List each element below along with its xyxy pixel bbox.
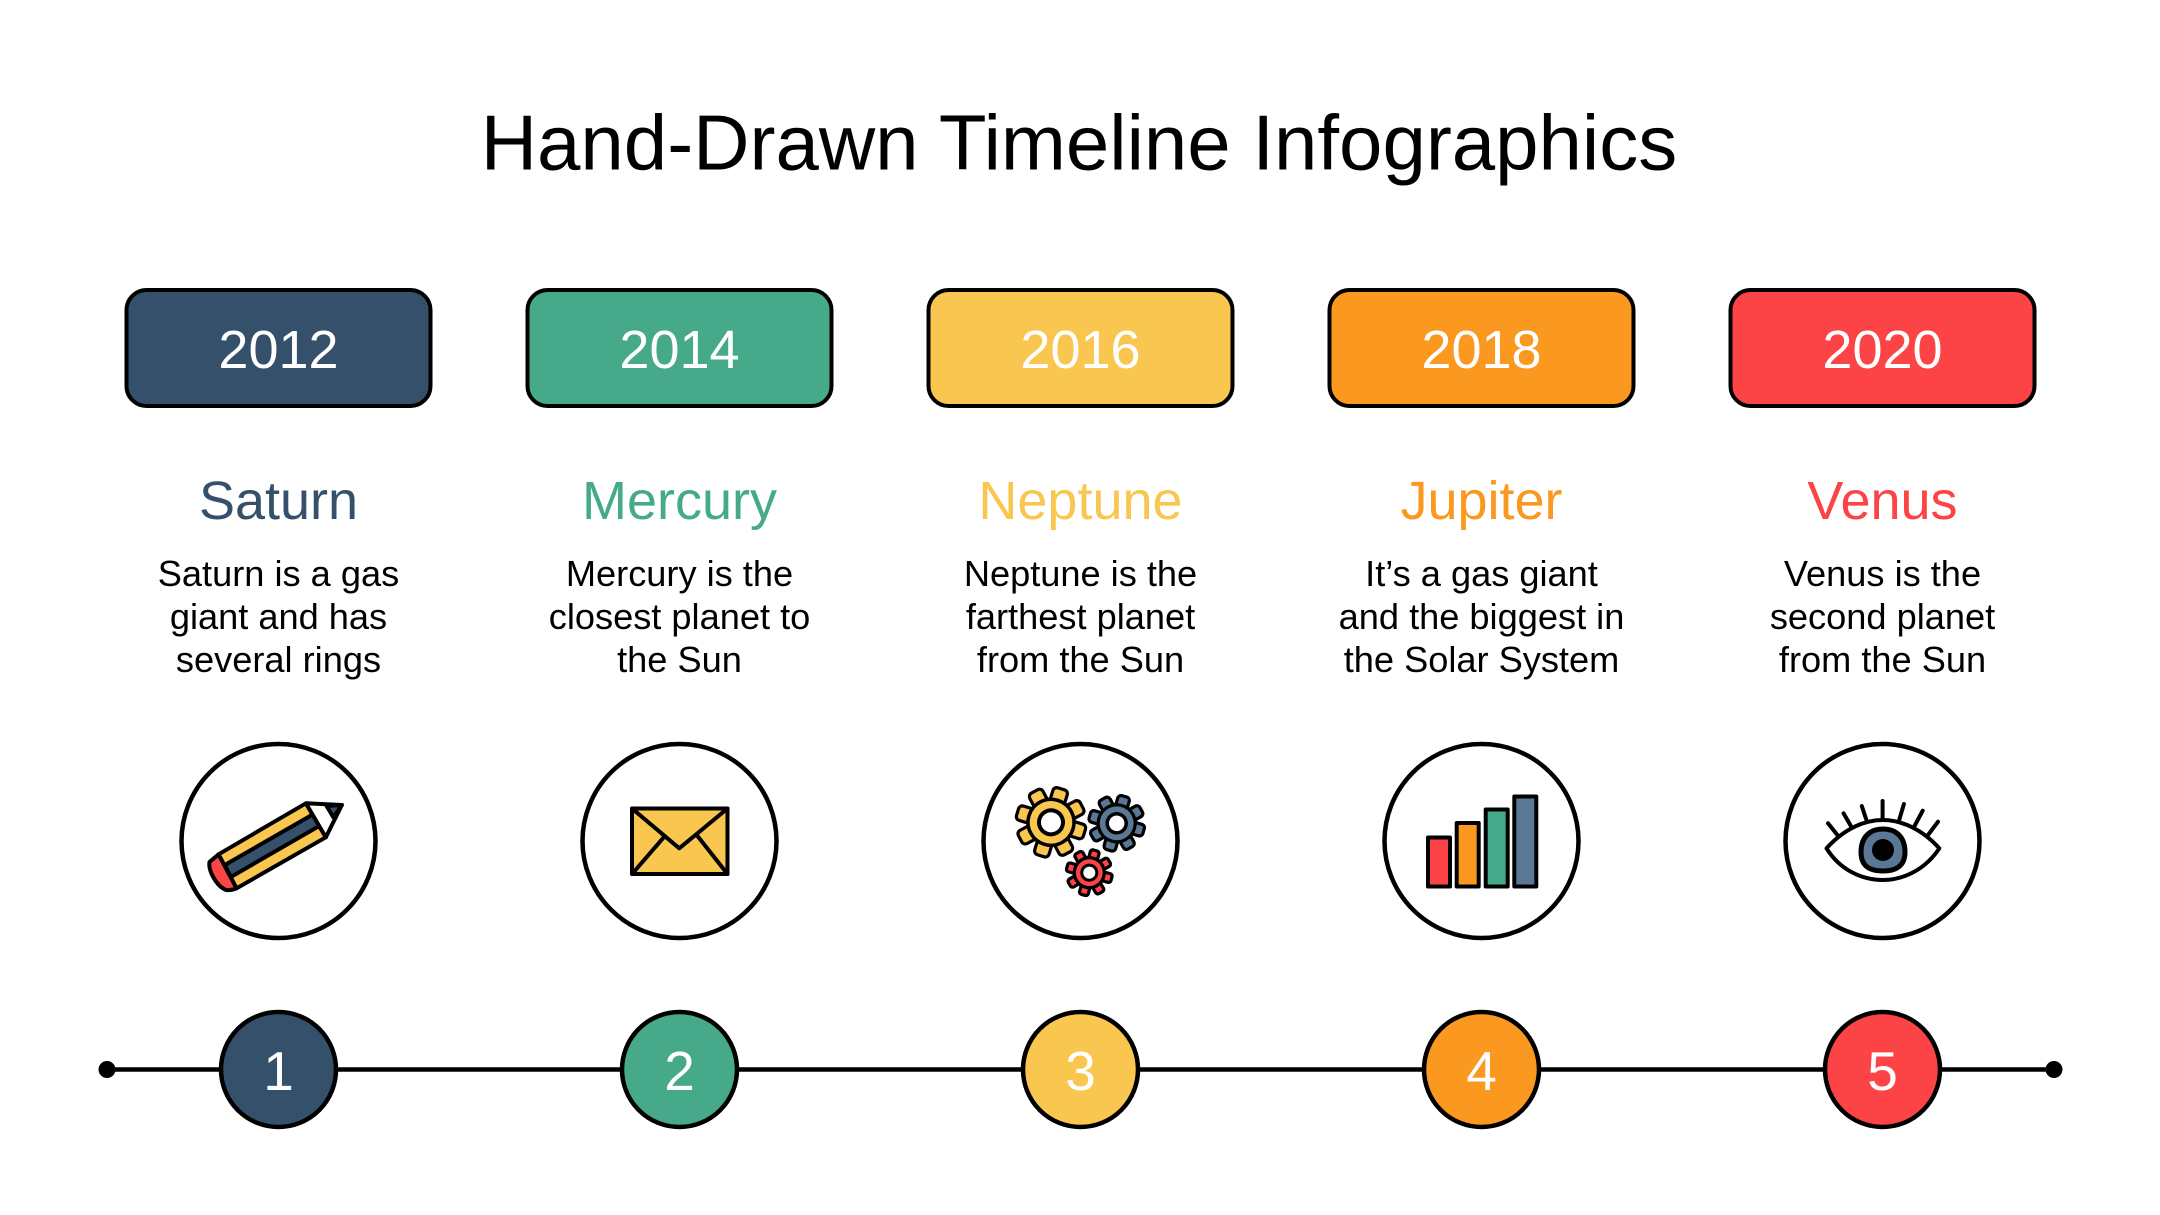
text block: Venus: second planet (1770, 596, 1995, 637)
number badge 5 (1825, 1012, 1940, 1127)
text block: Saturn (158, 553, 399, 680)
timeline axis (98, 1061, 2062, 1078)
text block: Mercury: closest planet to (549, 596, 810, 637)
panel: Mercury 2014 (528, 290, 832, 938)
number badge 1: 1 (263, 1040, 294, 1102)
year badge 2014 (528, 290, 832, 406)
icon: bar chart in circle (1384, 744, 1578, 938)
year badge 2016 (928, 290, 1232, 406)
number badge 2 (622, 1012, 737, 1127)
text block: Venus: Venus is the (1784, 553, 1981, 594)
text block: Saturn: several rings (176, 639, 381, 680)
text block: Venus (1770, 553, 1995, 680)
icon: gears in circle (984, 744, 1178, 938)
number badge 4 (1424, 1012, 1539, 1127)
text block: Jupiter: the Solar System (1344, 639, 1619, 680)
number badge 4: 4 (1466, 1040, 1497, 1102)
text block: Venus: from the Sun (1779, 639, 1986, 680)
heading: Saturn: Saturn (199, 471, 358, 531)
heading: Mercury: Mercury (582, 471, 777, 531)
panel: Neptune 2016 (928, 290, 1232, 938)
text block: Saturn: Saturn is a gas (158, 553, 399, 594)
panel: Venus 2020 (1730, 290, 2034, 938)
text block: Saturn: giant and has (170, 596, 387, 637)
number badge 3: 3 (1065, 1040, 1096, 1102)
text block: Neptune: Neptune is the (964, 553, 1197, 594)
heading: Jupiter: Jupiter (1400, 471, 1563, 531)
icon: eye in circle (1786, 744, 1980, 938)
year badge 2016: 2016 (1020, 320, 1141, 380)
year badge 2012: 2012 (218, 320, 339, 380)
icon: pencil in circle (182, 744, 376, 938)
year badge 2012 (126, 290, 430, 406)
number badge 3 (1023, 1012, 1138, 1127)
title: Hand-Drawn Timeline Infographics (481, 98, 1677, 186)
number badge 1 (221, 1012, 336, 1127)
heading: Venus: Venus (1807, 471, 1958, 531)
panel: Saturn 2012 (126, 290, 430, 938)
year badge 2018: 2018 (1421, 320, 1542, 380)
year badge 2018 (1330, 290, 1634, 406)
icon: envelope in circle (582, 744, 776, 938)
text block: Jupiter: It’s a gas giant (1365, 553, 1598, 594)
year badge 2014: 2014 (619, 320, 740, 380)
text block: Mercury: the Sun (617, 639, 742, 680)
year badge 2020 (1730, 290, 2034, 406)
panel: Jupiter 2018 (1330, 290, 1634, 938)
number badge 5: 5 (1867, 1040, 1898, 1102)
text block: Mercury: Mercury is the (566, 553, 793, 594)
text block: Mercury (549, 553, 810, 680)
text block: Neptune: farthest planet (966, 596, 1195, 637)
number badge 2: 2 (664, 1040, 695, 1102)
text block: Neptune (964, 553, 1197, 680)
heading: Neptune: Neptune (978, 471, 1183, 531)
text block: Jupiter: and the biggest in (1339, 596, 1624, 637)
text block: Jupiter (1339, 553, 1624, 680)
year badge 2020: 2020 (1822, 320, 1943, 380)
text block: Neptune: from the Sun (977, 639, 1184, 680)
